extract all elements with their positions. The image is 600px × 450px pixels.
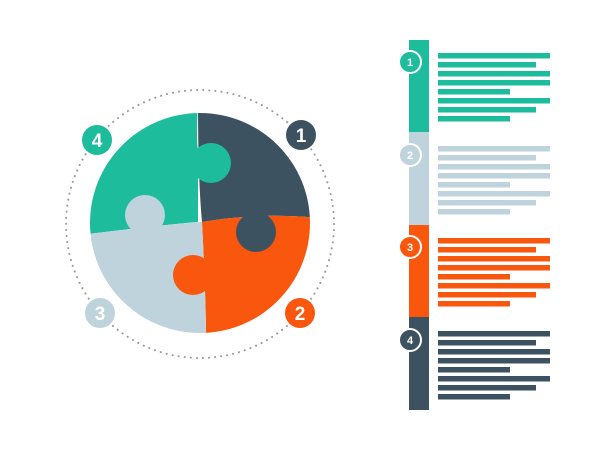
knob dark [236, 212, 276, 252]
section 4 [399, 317, 550, 410]
badge 2: 2 [295, 304, 305, 325]
section 4: 4 [407, 335, 414, 347]
section 1 [399, 40, 550, 132]
badge 3: 3 [95, 304, 105, 325]
badge 4 [82, 125, 112, 155]
piece 3 light [90, 222, 206, 333]
knob light [125, 195, 165, 235]
section 1: 1 [407, 57, 413, 69]
knob orange [173, 255, 213, 295]
badge 2 [285, 298, 315, 328]
piece 2 orange [202, 216, 310, 333]
dotted ring [66, 90, 334, 358]
knob teal [191, 143, 231, 183]
badge 1: 1 [296, 126, 307, 147]
section 2 [399, 132, 550, 225]
badge 3 [85, 298, 115, 328]
puzzle circle [90, 113, 310, 333]
section 3: 3 [407, 242, 413, 254]
badge 4: 4 [92, 131, 103, 152]
piece 4 teal [90, 113, 198, 234]
section 2: 2 [407, 150, 413, 162]
badge 1 [286, 120, 316, 150]
piece 1 dark [198, 113, 310, 222]
section 3 [399, 225, 550, 317]
